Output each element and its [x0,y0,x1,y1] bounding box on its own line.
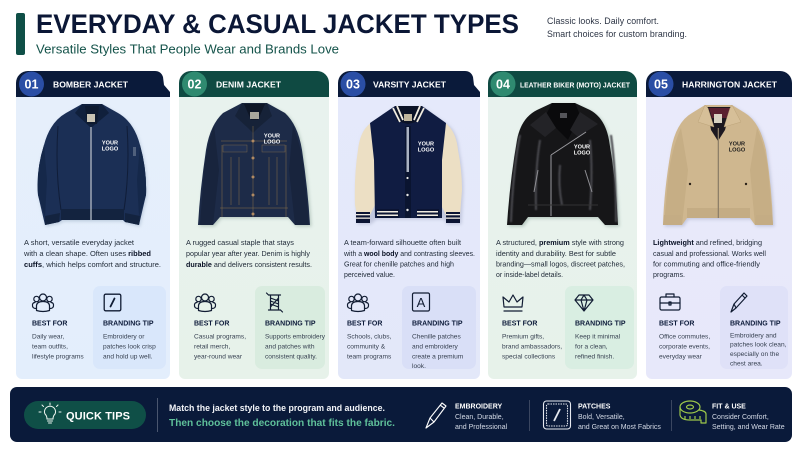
description: A structured, premium style with strong [496,238,624,247]
subtitle: Versatile Styles That People Wear and Brands Love [36,42,339,56]
header: bomber jacket [16,71,170,97]
jacket image: varsity [355,106,464,224]
description: with a clean shape. Often uses ribbed [23,249,151,258]
branding tip [730,320,787,368]
description: popular year after year. Denim is highly [186,249,310,258]
header: varsity jacket [338,71,480,97]
jacket image: leather biker: LOGO [574,150,591,156]
panel: leather biker jacket [488,71,637,379]
branding tip: Keep it minimal [575,334,621,340]
branding tip: and patches with [265,344,315,350]
divider [671,400,672,431]
description: durable and delivers consistent results. [186,260,312,269]
embroidery tip: EMBROIDERY [455,404,503,410]
branding tip [265,320,326,360]
header: harrington jacket: 05 [654,78,668,92]
description: identity and durability. Best for subtle [496,249,616,258]
branding tip [575,320,626,360]
header: denim jacket: DENIM JACKET [216,80,282,90]
quick tips divider [157,398,158,432]
description: A rugged casual staple that stays [186,238,294,247]
branding tip box [402,286,476,369]
icon: patch [104,294,121,311]
panel: varsity jacket [338,71,480,379]
icon: light bulb [39,403,61,423]
branding tip: for a clean, [575,344,608,350]
patches tip: and Great on Most Fabrics [578,424,661,431]
fit and use tip [680,401,785,431]
jacket image: leather biker: YOUR [574,144,590,150]
best for: BEST FOR [502,320,537,328]
title accent bar [16,13,25,55]
quick tips pill [24,401,146,429]
branding tip: BRANDING TIP [730,320,781,328]
best for: BEST FOR [347,320,382,328]
branding tip [412,320,464,370]
branding tip: BRANDING TIP [575,320,626,328]
best for: corporate events, [659,344,710,350]
jacket image: bomber [38,104,147,226]
branding tip: look. [412,363,426,370]
branding tip: BRANDING TIP [103,320,154,328]
description: or inside-label details. [496,270,563,279]
best for: BEST FOR [32,320,67,328]
best for [194,320,246,360]
branding tip box [93,286,166,369]
icon: patch [544,401,570,429]
branding tip: create a premium [412,354,464,360]
branding tip: BRANDING TIP [412,320,463,328]
header: denim jacket [179,71,329,97]
tagline: Smart choices for custom branding. [547,29,687,39]
panel: harrington jacket [646,71,792,379]
icon: thread spool [266,293,282,312]
branding tip box [255,286,325,369]
patches tip: Bold, Versatile, [578,414,625,421]
description [653,238,766,279]
fit and use tip: Setting, and Wear Rate [712,424,785,431]
header: varsity jacket: VARSITY JACKET [373,80,447,90]
tagline [547,16,687,39]
best for: team programs [347,354,392,360]
best for: Daily wear, [32,334,64,340]
description [496,238,625,279]
description: branding—small logos, discreet patches, [496,260,625,268]
panel: bomber jacket [16,71,170,379]
description: A team-forward silhouette often built [344,238,462,247]
best for [347,320,392,360]
icon: briefcase [660,294,680,310]
description: with a wool body and contrasting sleeves. [343,249,475,258]
description: perceived value. [344,270,395,279]
header: leather biker jacket: LEATHER BIKER (MOTO) JACKET [520,80,630,90]
best for [659,320,710,360]
quick tips message [169,403,395,429]
header: bomber jacket: BOMBER JACKET [53,80,129,90]
branding tip: Supports embroidery [265,334,326,340]
branding tip [103,320,156,360]
divider [529,400,530,431]
branding tip: BRANDING TIP [265,320,316,328]
header: harrington jacket [646,71,792,97]
tagline: Classic looks. Daily comfort. [547,16,659,26]
quick tips pill: QUICK TIPS [66,410,130,422]
fit and use tip: Consider Comfort, [712,414,769,421]
title: EVERYDAY & CASUAL JACKET TYPES [36,9,519,39]
header: harrington jacket: HARRINGTON JACKET [682,80,778,90]
icon: letter patch: A [417,295,426,310]
patches tip: PATCHES [578,404,611,410]
best for: everyday wear [659,354,703,360]
jacket image: bomber: YOUR [102,140,118,146]
embroidery tip: Clean, Durable, [455,414,504,421]
icon: people [194,294,216,312]
best for [32,320,84,360]
best for: retail merch, [194,344,230,350]
panel: denim jacket [179,71,329,379]
branding tip: patches look clean, [730,342,787,348]
branding tip box [720,286,788,369]
branding tip: chest area. [730,360,763,368]
description: for commuting and office-friendly [653,260,760,268]
description: A short, versatile everyday jacket [24,238,135,247]
jacket image: bomber: LOGO [102,146,119,152]
icon: people [32,294,54,312]
description: Lightweight and refined, bridging [653,238,762,247]
best for: BEST FOR [194,320,229,328]
best for: Premium gifts, [502,334,544,340]
branding tip: patches look crisp [103,344,156,350]
best for [502,320,562,360]
header: leather biker jacket [488,71,637,97]
jacket image: harrington [663,105,774,226]
branding tip: refined finish. [575,354,614,360]
icon: embroidery needle [426,403,446,428]
embroidery tip [426,403,508,431]
branding tip: especially on the [730,351,779,358]
icon: diamond [575,295,593,311]
icon: tape measure [680,401,706,423]
header: leather biker jacket: 04 [496,78,510,92]
fit and use tip: FIT & USE [712,404,746,410]
jacket image: denim: LOGO [264,140,281,146]
branding tip: Chenille patches [412,334,461,340]
jacket image: leather biker [507,103,620,226]
quick tips message: Then choose the decoration that fits the fabric. [169,418,395,429]
jacket image: varsity: YOUR [418,142,434,148]
icon: needle pen [731,293,747,312]
best for: community & [347,344,386,350]
branding tip: Embroidery and [730,332,777,340]
best for: Office commutes, [659,334,710,340]
jacket image: harrington: YOUR [729,142,745,148]
best for: lifestyle programs [32,354,84,360]
patches tip [544,401,661,431]
best for: Casual programs, [194,334,246,340]
quick tips message: Match the jacket style to the program and audience. [169,403,385,413]
header: bomber jacket: 01 [25,78,38,92]
jacket image: denim [198,103,312,226]
best for: BEST FOR [659,320,694,328]
branding tip: and embroidery [412,344,459,350]
description [186,238,312,269]
best for: year-round wear [194,354,243,360]
description: casual and professional. Works well [653,249,766,258]
icon: crown [503,295,523,311]
icon: letter patch [412,293,430,311]
embroidery tip: and Professional [455,424,508,431]
best for: team outfits, [32,344,68,350]
header: denim jacket: 02 [188,78,201,92]
jacket image: varsity: LOGO [418,148,435,154]
jacket image: harrington: LOGO [729,148,746,154]
description: cuffs, which helps comfort and structure. [24,260,161,269]
jacket image: denim: YOUR [264,134,280,140]
branding tip box [565,286,634,369]
branding tip: and hold up well. [103,354,153,360]
header: varsity jacket: 03 [346,78,360,92]
icon: people [347,294,369,312]
description [23,238,161,269]
quick tips bar [10,387,792,442]
best for: Schools, clubs, [347,334,392,340]
best for: brand ambassadors, [502,344,562,350]
branding tip: Embroidery or [103,334,145,340]
description [343,238,475,279]
description: Great for chenille patches and high [344,260,454,268]
description: programs. [653,270,685,279]
best for: special collections [502,354,556,360]
branding tip: consistent quality. [265,354,317,360]
